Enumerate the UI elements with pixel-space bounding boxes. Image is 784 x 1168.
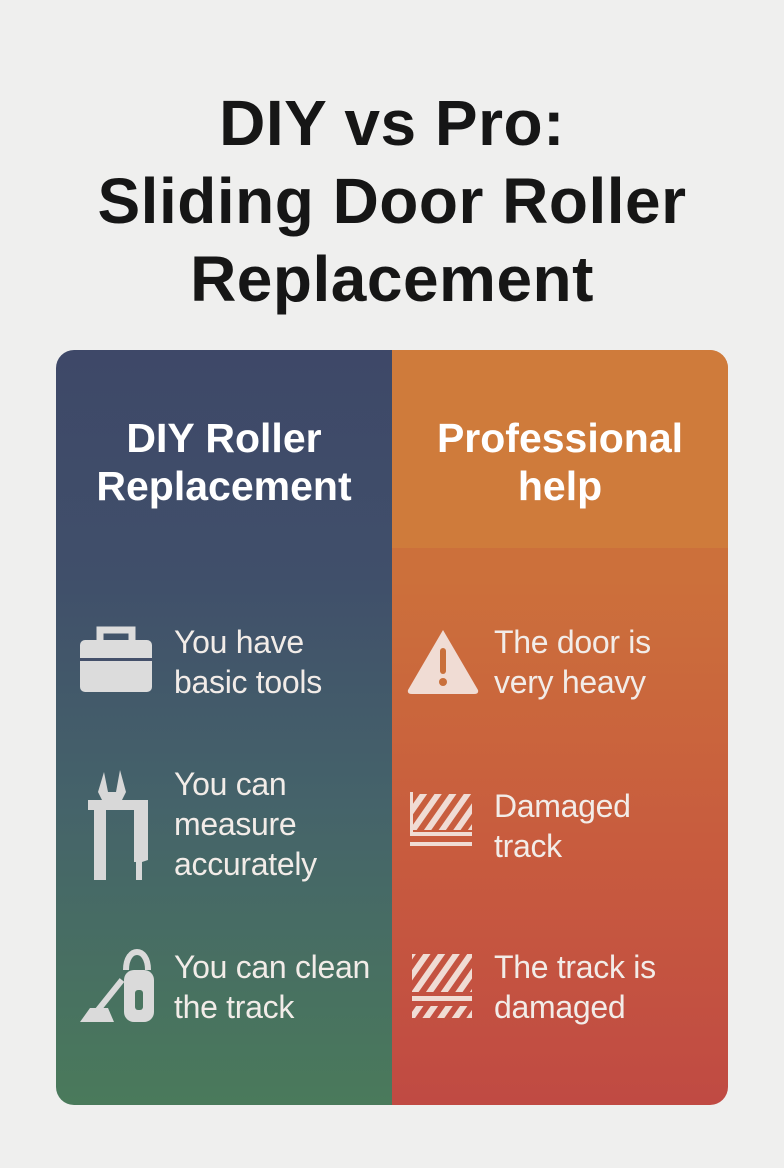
title: Sliding Door Roller (97, 165, 687, 237)
text: track is damaged: damaged (494, 989, 625, 1025)
text: clean track (174, 949, 370, 1025)
heading: DIY: DIY Roller (126, 415, 322, 461)
icon: warning (408, 630, 478, 694)
icon: caliper (88, 770, 148, 880)
text: heavy door: The door is (494, 624, 651, 660)
icon: damaged track (410, 792, 472, 846)
heading: Professional (437, 415, 683, 509)
text: basic tools: You have (174, 624, 304, 660)
icon: track damaged (412, 954, 472, 1018)
text: damaged track (494, 788, 631, 864)
text: damaged track: Damaged (494, 788, 631, 824)
text: measure: You can (174, 766, 286, 802)
title (97, 87, 687, 315)
text: measure: measure (174, 806, 296, 842)
text: basic tools: basic tools (174, 664, 322, 700)
text: heavy door (494, 624, 651, 700)
text: clean track: the track (174, 989, 294, 1025)
text: track is damaged (494, 949, 656, 1025)
icon: vacuum (80, 949, 154, 1022)
text: heavy door: very heavy (494, 664, 646, 700)
text: track is damaged: The track is (494, 949, 656, 985)
text: basic tools (174, 624, 322, 700)
heading: Professional: help (518, 463, 602, 509)
heading: DIY: Replacement (96, 463, 352, 509)
text: measure (174, 766, 317, 882)
text: clean track: You can clean (174, 949, 370, 985)
heading: Professional: Professional (437, 415, 683, 461)
panel: comparison (56, 350, 728, 1105)
heading: DIY (96, 415, 352, 509)
text: damaged track: track (494, 828, 562, 864)
icon: toolbox (80, 626, 152, 692)
text: measure: accurately (174, 846, 317, 882)
title: DIY vs Pro: (219, 87, 565, 159)
title: Replacement (190, 243, 594, 315)
